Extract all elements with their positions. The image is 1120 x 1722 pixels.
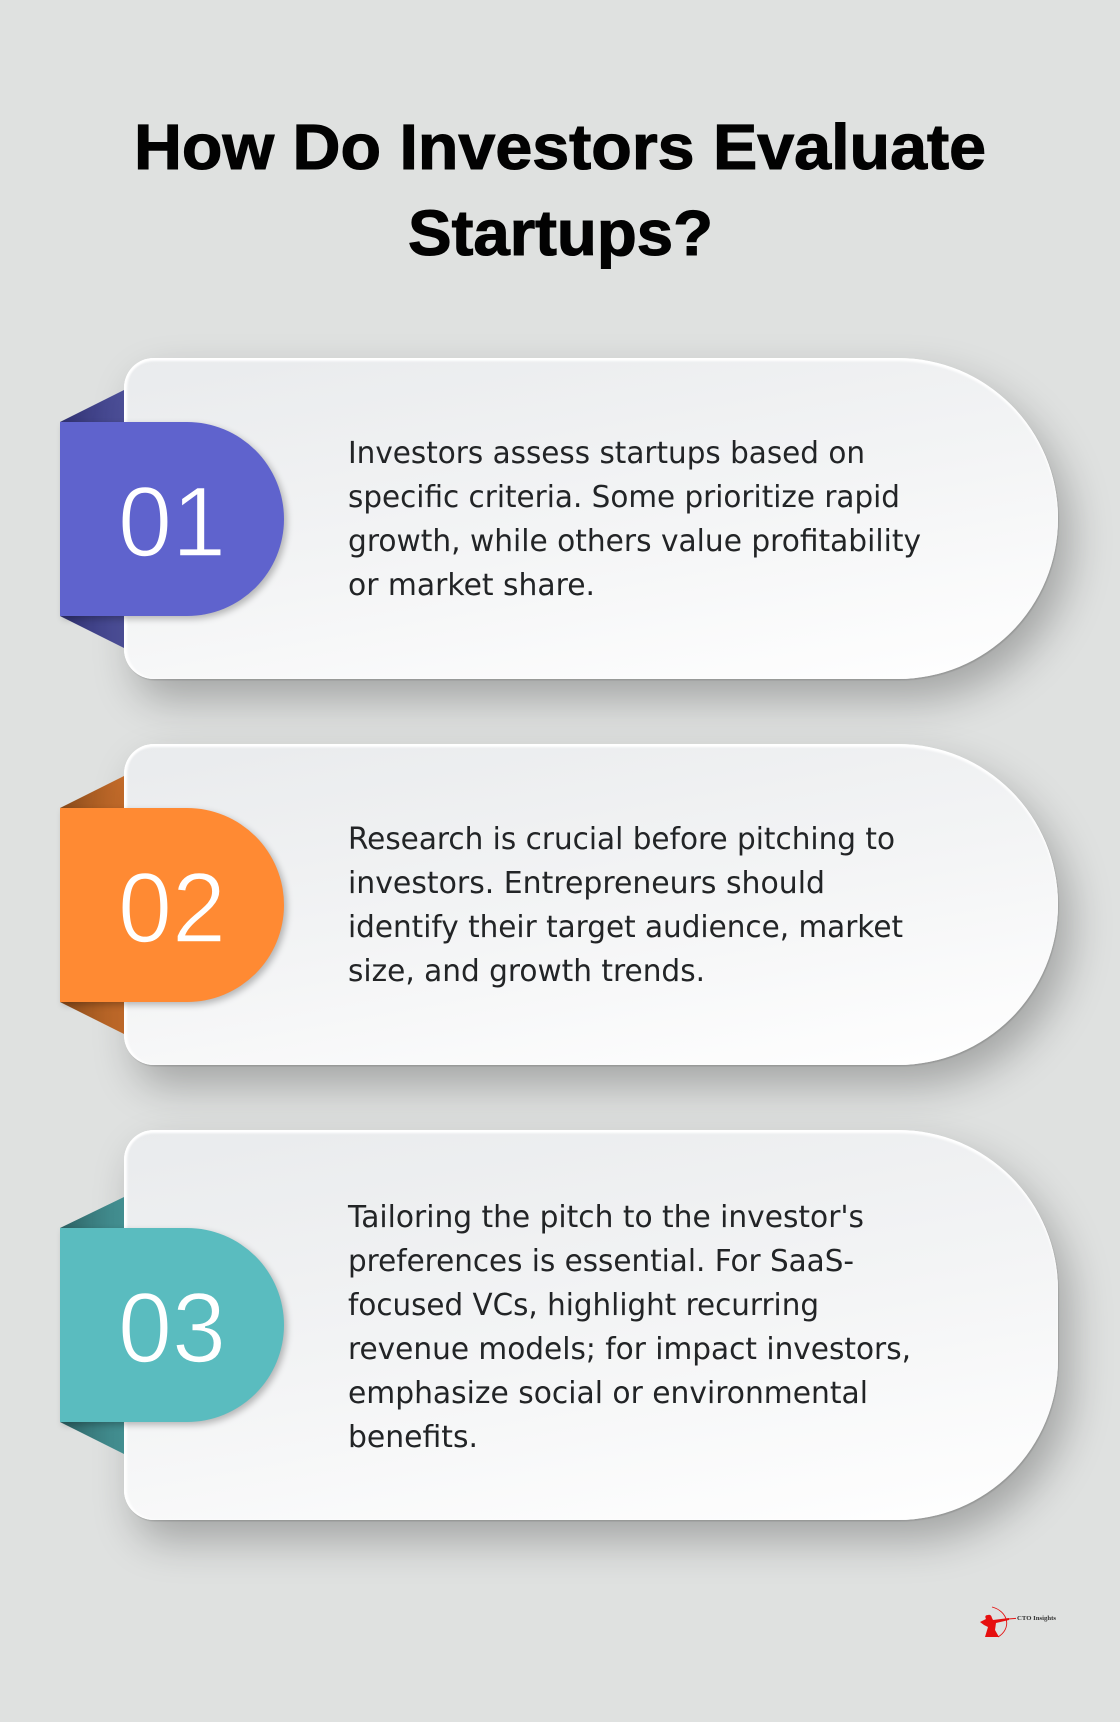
logo: CTO Insights archer	[980, 1606, 1057, 1638]
badge: 02: 02	[118, 852, 226, 963]
badge: 01: 01	[118, 466, 226, 577]
text: step 02 description: size, and growth trends.	[348, 954, 705, 989]
text: step 03 description: revenue models; for impact investors,	[348, 1332, 911, 1367]
text: step 03 description: preferences is essential. For SaaS-	[348, 1244, 854, 1279]
text: step 02 description: identify their target audience, market	[348, 910, 903, 945]
card: step 02	[124, 744, 1058, 1065]
title: Startups?	[408, 197, 713, 269]
text: step 02 description: Research is crucial before pitching to	[348, 822, 895, 857]
card: step 03	[124, 1130, 1058, 1520]
badge: 02	[60, 808, 284, 1002]
badge: 01	[60, 422, 284, 616]
panel: step 03	[60, 1128, 1092, 1562]
panel: step 02	[60, 742, 1090, 1106]
fold: step 01 ribbon	[60, 390, 124, 648]
text: step 03 description: benefits.	[348, 1420, 478, 1455]
logo: CTO Insights archer: CTO Insights	[1017, 1615, 1057, 1622]
title: How Do Investors Evaluate	[134, 111, 986, 183]
text: step 01 description: or market share.	[348, 568, 595, 603]
text: step 03 description: emphasize social or environmental	[348, 1376, 868, 1411]
text: step 01 description	[348, 436, 921, 603]
text: step 02 description	[348, 822, 903, 989]
card: step 01	[124, 358, 1058, 679]
text: step 03 description: Tailoring the pitch to the investor's	[347, 1200, 864, 1235]
text: step 03 description	[347, 1200, 911, 1455]
text: step 01 description: growth, while others value profitability	[348, 524, 921, 559]
text: step 01 description: specific criteria. Some prioritize rapid	[348, 480, 900, 515]
text: step 01 description: Investors assess startups based on	[348, 436, 865, 471]
panel: step 01	[60, 356, 1090, 720]
badge: 03: 03	[118, 1272, 226, 1383]
fold: step 03 ribbon	[60, 1197, 124, 1454]
text: step 02 description: investors. Entrepreneurs should	[348, 866, 825, 901]
fold: step 02 ribbon	[60, 776, 124, 1034]
badge: 03	[60, 1228, 284, 1422]
text: step 03 description: focused VCs, highlight recurring	[348, 1288, 819, 1323]
title	[134, 111, 986, 269]
